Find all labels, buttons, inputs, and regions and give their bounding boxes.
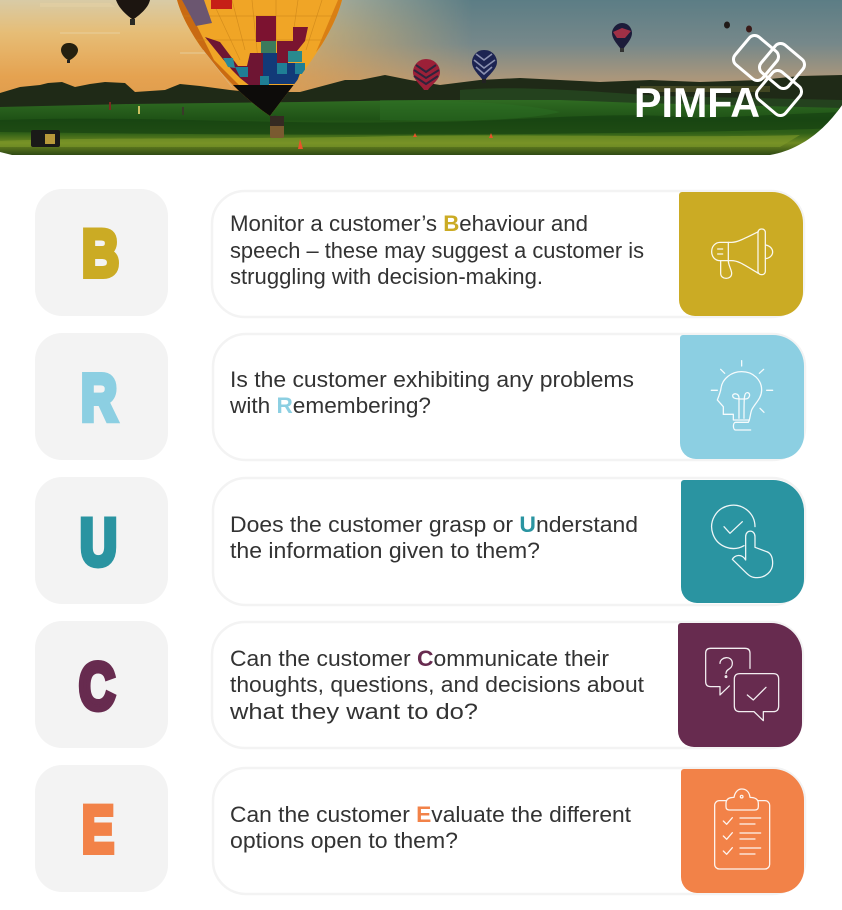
sky [0, 0, 842, 110]
text C: thoughts, questions, and decisions about [230, 672, 645, 697]
icon panel: megaphone [679, 192, 803, 316]
text U: Does the customer grasp or Understand [230, 512, 638, 537]
text R [229, 367, 634, 418]
letter tile E: E [82, 792, 114, 866]
ground details [31, 102, 493, 149]
icon panel: hand tapping check [681, 480, 804, 603]
text B [230, 211, 644, 289]
PIMFA logo [634, 33, 807, 126]
icon panel: clipboard checklist [681, 769, 804, 893]
text R: with Remembering? [229, 393, 431, 418]
letter tile C: C [79, 649, 115, 723]
letter tile B [35, 189, 168, 316]
text U [230, 512, 638, 563]
card E [213, 768, 805, 894]
letter tile U [35, 477, 168, 604]
text U: the information given to them? [230, 538, 540, 563]
card C [212, 622, 803, 748]
text C [229, 646, 645, 724]
icon panel: lightbulb head [680, 335, 804, 459]
text C: what they want to do? [229, 699, 478, 724]
large balloon [170, 0, 350, 138]
logo wordmark: PIMFA [634, 79, 760, 126]
logo icon [731, 33, 807, 118]
row R [35, 333, 805, 460]
row U [35, 477, 805, 605]
letter tile B: B [82, 216, 119, 290]
text B: Monitor a customer’s Behaviour and [230, 211, 588, 236]
text B: speech – these may suggest a customer is [230, 238, 644, 263]
grass field [0, 100, 842, 155]
letter tile C [35, 621, 168, 748]
text R: Is the customer exhibiting any problems [230, 367, 634, 392]
row C [35, 621, 803, 748]
tree line [0, 75, 842, 112]
row E [35, 765, 805, 894]
card U [213, 478, 805, 605]
text E: options open to them? [230, 828, 458, 853]
row B [35, 189, 804, 317]
small balloons [61, 0, 752, 90]
letter tile R [35, 333, 168, 460]
text B: struggling with decision-making. [230, 264, 543, 289]
header photo: hot air balloons at sunset [0, 0, 842, 155]
letter tile U: U [80, 505, 117, 579]
text C: Can the customer Communicate their [230, 646, 610, 671]
text E [230, 802, 632, 853]
letter tile E [35, 765, 168, 892]
card R [213, 334, 805, 460]
letter tile R: R [81, 360, 117, 434]
text E: Can the customer Evaluate the different [230, 802, 632, 827]
icon panel: chat bubbles [678, 623, 802, 747]
card B [212, 191, 804, 317]
